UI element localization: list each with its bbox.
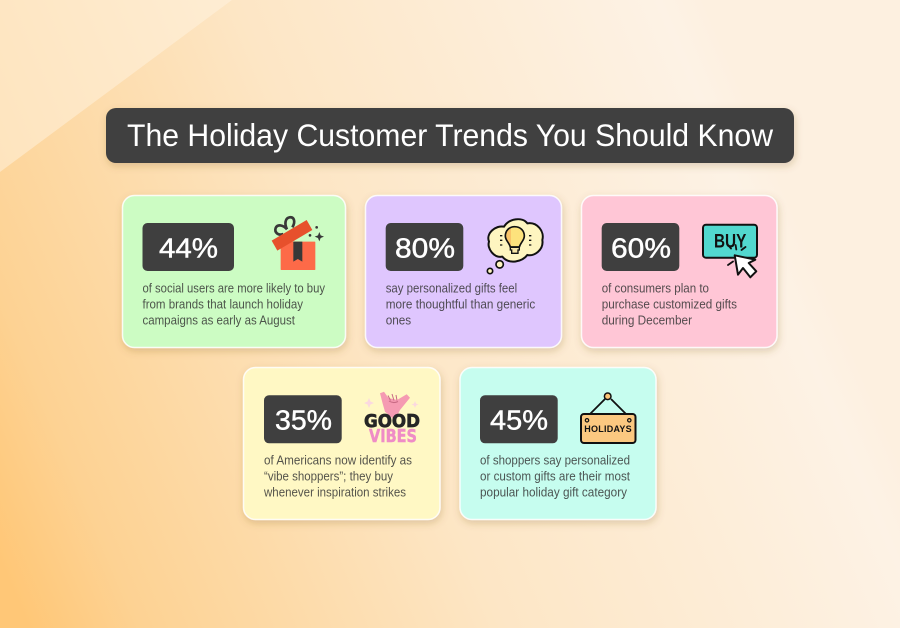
description	[263, 453, 412, 500]
panel: 35% vibe shoppers	[244, 368, 440, 520]
description: campaigns as early as August	[142, 313, 295, 328]
stat badge 44%	[142, 223, 234, 271]
icon: good vibes hand	[364, 392, 420, 447]
stat badge 80%	[386, 223, 463, 271]
description: purchase customized gifts	[602, 297, 737, 312]
title text: The Holiday Customer Trends You Should Know	[127, 117, 773, 153]
stat badge 45%: 45%	[490, 405, 548, 436]
description: whenever inspiration strikes	[263, 485, 406, 500]
description: of shoppers say personalized	[480, 453, 630, 468]
description: or custom gifts are their most	[480, 469, 630, 484]
icon: good vibes hand: GOOD	[364, 411, 420, 432]
panel: 60% customized gifts	[582, 196, 777, 348]
icon: holidays hanging sign: HOLIDAYS	[584, 424, 632, 434]
background light wedge	[0, 0, 232, 172]
description: ones	[386, 313, 412, 328]
icon: thought bubble with light bulb	[487, 219, 543, 274]
description: of Americans now identify as	[264, 453, 412, 468]
description: during December	[602, 313, 693, 328]
icon: buy button with cursor: BUY	[714, 230, 746, 252]
description: popular holiday gift category	[480, 485, 627, 500]
icon: good vibes hand: VIBES	[369, 426, 417, 447]
stat badge 60%: 60%	[611, 232, 671, 264]
description	[386, 281, 536, 328]
panel: 44% social users	[122, 196, 346, 348]
description	[602, 281, 737, 328]
stat badge 44%: 44%	[159, 232, 218, 264]
stat badge 60%	[602, 223, 679, 271]
description	[480, 453, 630, 500]
icon: buy button with cursor	[703, 225, 757, 277]
description: “vibe shoppers”; they buy	[264, 469, 393, 484]
description: more thoughtful than generic	[386, 297, 536, 312]
stat badge 35%	[264, 395, 342, 443]
stat badge 45%	[480, 395, 558, 443]
description	[142, 281, 325, 328]
title bar	[106, 108, 794, 163]
description: of consumers plan to	[602, 281, 709, 296]
icon: gift box	[272, 217, 324, 270]
panel: 80% personalized gifts	[366, 196, 562, 348]
icon: holidays hanging sign	[581, 393, 636, 443]
description: of social users are more likely to buy	[142, 281, 325, 296]
description: from brands that launch holiday	[142, 297, 303, 312]
stat badge 35%: 35%	[275, 405, 332, 436]
panel: 45% custom gifts	[460, 368, 656, 520]
description: say personalized gifts feel	[386, 281, 517, 296]
stat badge 80%: 80%	[395, 232, 455, 264]
